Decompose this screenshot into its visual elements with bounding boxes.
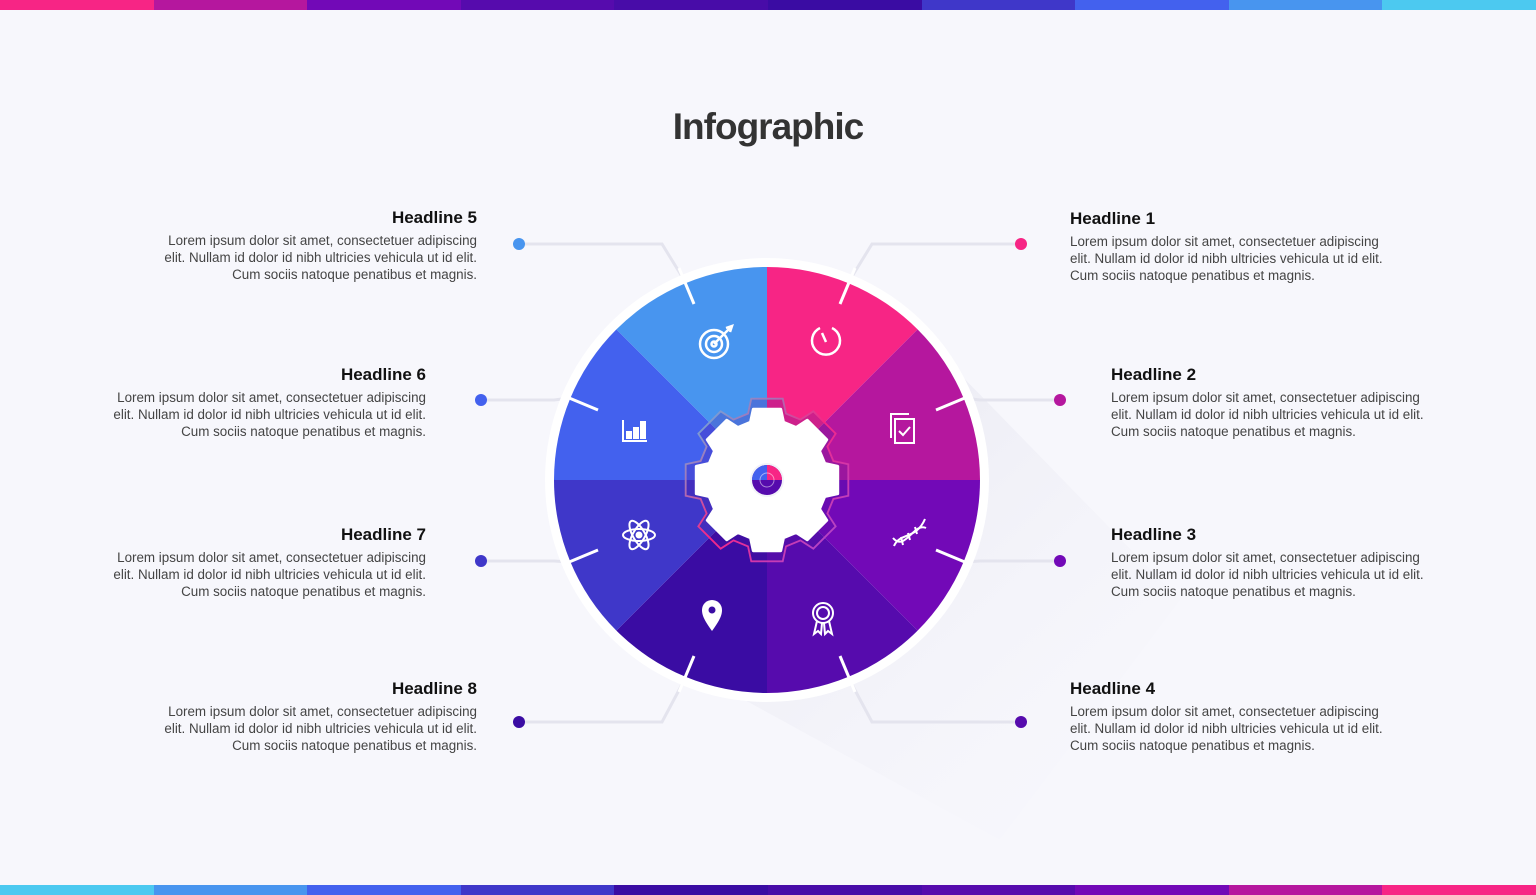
bottom color bar bbox=[0, 885, 1536, 895]
text: headline 6: Headline 6 bbox=[341, 365, 426, 384]
text: headline 2: Headline 2 bbox=[1111, 365, 1196, 384]
text: headline 4: elit. Nullam id dolor id nibh ultricies vehicula ut id elit. bbox=[1070, 721, 1383, 736]
icon: dna bbox=[893, 519, 926, 546]
icon: bar chart bbox=[623, 420, 647, 441]
text: headline 5 bbox=[164, 208, 477, 282]
text: headline 7: Lorem ipsum dolor sit amet, consectetuer adipiscing bbox=[117, 550, 426, 565]
text: headline 5: Headline 5 bbox=[392, 208, 477, 227]
text: headline 1: Cum sociis natoque penatibus et magnis. bbox=[1070, 268, 1315, 283]
text: headline 8: elit. Nullam id dolor id nibh ultricies vehicula ut id elit. bbox=[164, 721, 477, 736]
text: headline 4: Lorem ipsum dolor sit amet, consectetuer adipiscing bbox=[1070, 704, 1379, 719]
text: headline 8: Headline 8 bbox=[392, 679, 477, 698]
text: headline 2: elit. Nullam id dolor id nibh ultricies vehicula ut id elit. bbox=[1111, 407, 1424, 422]
connector lines bbox=[481, 244, 1060, 722]
text: headline 1: elit. Nullam id dolor id nibh ultricies vehicula ut id elit. bbox=[1070, 251, 1383, 266]
text: headline 2: Cum sociis natoque penatibus et magnis. bbox=[1111, 424, 1356, 439]
title: Infographic bbox=[673, 106, 863, 147]
text: headline 8: Lorem ipsum dolor sit amet, consectetuer adipiscing bbox=[168, 704, 477, 719]
text: headline 6 bbox=[113, 365, 426, 439]
text: headline 3 bbox=[1111, 525, 1424, 599]
text: headline 1: Lorem ipsum dolor sit amet, consectetuer adipiscing bbox=[1070, 234, 1379, 249]
text: headline 3: Cum sociis natoque penatibus et magnis. bbox=[1111, 584, 1356, 599]
text: headline 6: elit. Nullam id dolor id nibh ultricies vehicula ut id elit. bbox=[113, 407, 426, 422]
text: headline 6: Cum sociis natoque penatibus et magnis. bbox=[181, 424, 426, 439]
text: headline 3: Lorem ipsum dolor sit amet, consectetuer adipiscing bbox=[1111, 550, 1420, 565]
top color bar bbox=[0, 0, 1536, 10]
icon: timer bbox=[812, 328, 840, 355]
segments bbox=[554, 267, 980, 693]
text: headline 7 bbox=[113, 525, 426, 599]
shadow bbox=[617, 330, 1180, 840]
icon: atom bbox=[623, 518, 655, 552]
text: headline 7: Cum sociis natoque penatibus et magnis. bbox=[181, 584, 426, 599]
text: headline 2: Lorem ipsum dolor sit amet, consectetuer adipiscing bbox=[1111, 390, 1420, 405]
icon: documents bbox=[891, 414, 914, 443]
icon: pin bbox=[702, 600, 722, 631]
text: headline 5: Lorem ipsum dolor sit amet, consectetuer adipiscing bbox=[168, 233, 477, 248]
outer white ring bbox=[545, 258, 989, 702]
ticks bbox=[562, 268, 972, 692]
text: headline 1: Headline 1 bbox=[1070, 209, 1155, 228]
text: headline 4 bbox=[1070, 679, 1383, 753]
dots bbox=[475, 238, 1066, 728]
gear bbox=[686, 399, 848, 561]
text: headline 1 bbox=[1070, 209, 1383, 283]
text: headline 4: Headline 4 bbox=[1070, 679, 1155, 698]
text: headline 6: Lorem ipsum dolor sit amet, consectetuer adipiscing bbox=[117, 390, 426, 405]
text: headline 5: Cum sociis natoque penatibus et magnis. bbox=[232, 267, 477, 282]
text: headline 2 bbox=[1111, 365, 1424, 439]
text: headline 7: elit. Nullam id dolor id nibh ultricies vehicula ut id elit. bbox=[113, 567, 426, 582]
text: headline 3: elit. Nullam id dolor id nibh ultricies vehicula ut id elit. bbox=[1111, 567, 1424, 582]
text: headline 5: elit. Nullam id dolor id nibh ultricies vehicula ut id elit. bbox=[164, 250, 477, 265]
text: headline 8 bbox=[164, 679, 477, 753]
text: headline 7: Headline 7 bbox=[341, 525, 426, 544]
icons bbox=[623, 326, 926, 634]
text: headline 4: Cum sociis natoque penatibus et magnis. bbox=[1070, 738, 1315, 753]
text: headline 3: Headline 3 bbox=[1111, 525, 1196, 544]
text: headline 8: Cum sociis natoque penatibus et magnis. bbox=[232, 738, 477, 753]
icon: award bbox=[813, 603, 833, 634]
icon: target bbox=[700, 326, 732, 358]
